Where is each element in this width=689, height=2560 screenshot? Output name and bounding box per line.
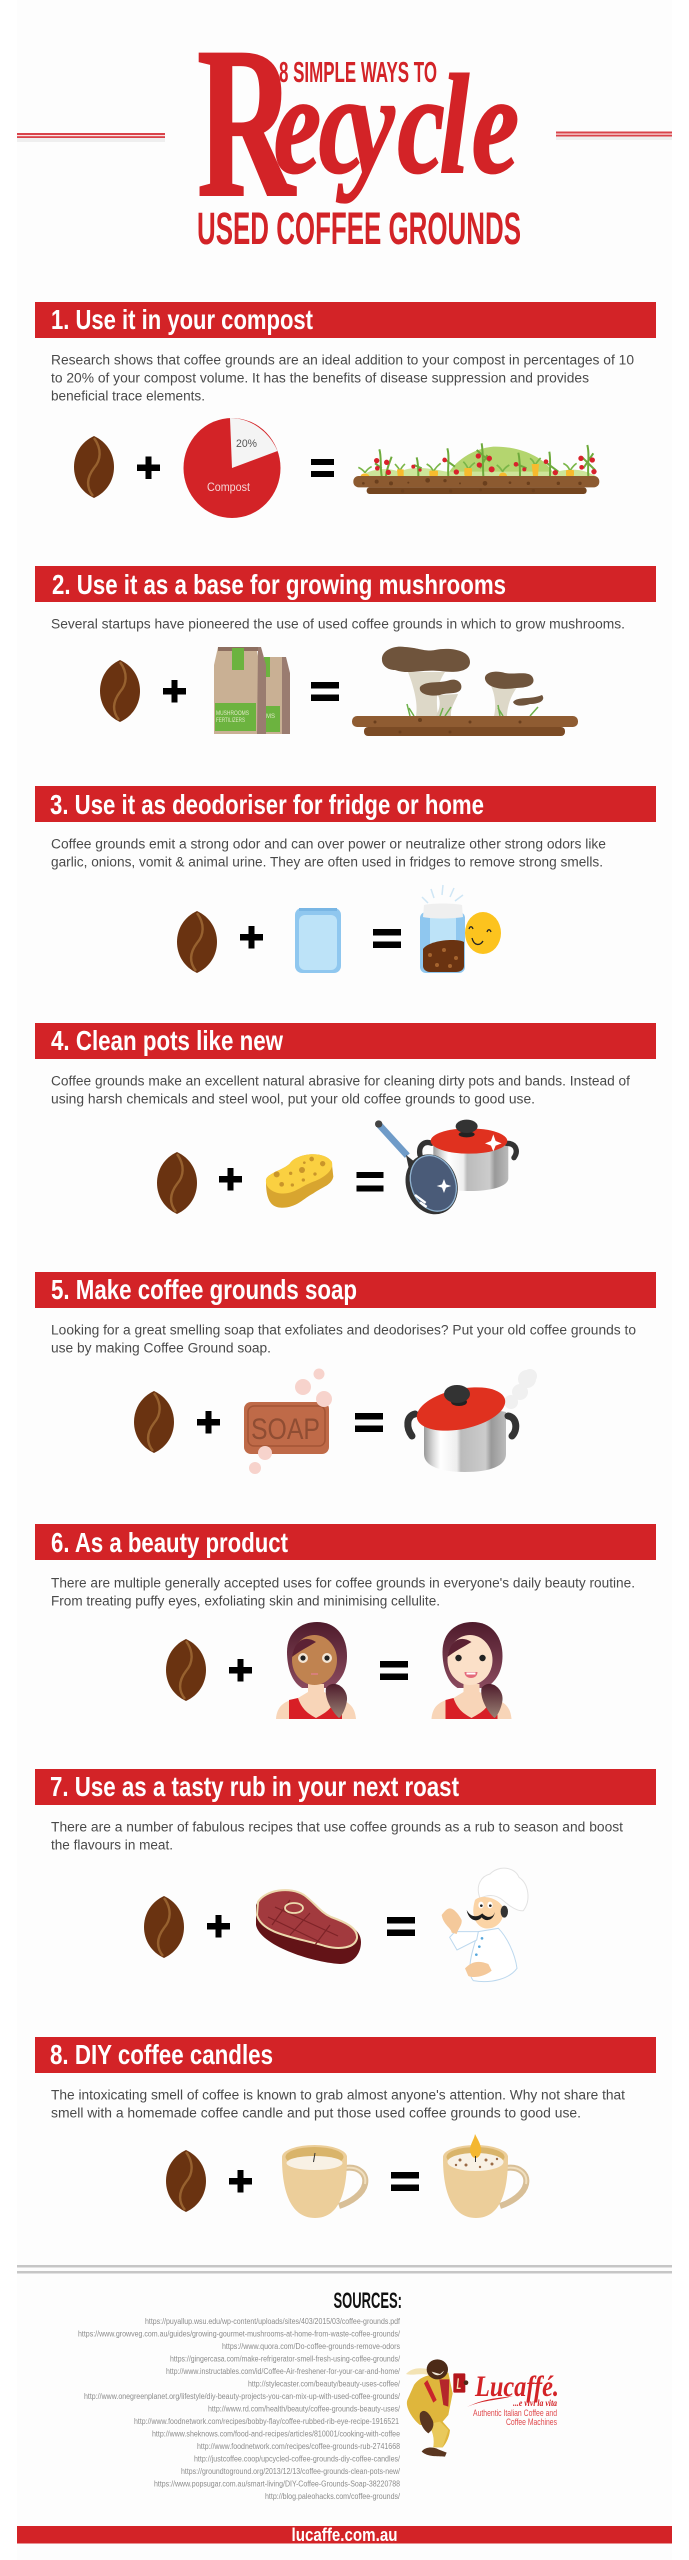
text block 7	[51, 1820, 623, 1852]
icon: coffee bean	[157, 1152, 197, 1214]
heading 8	[35, 2037, 656, 2073]
sources list: http://www.rd.com/health/beauty/coffee-grounds-beauty-uses/	[208, 2404, 401, 2414]
plus	[197, 1411, 220, 1434]
icon: fertilizer bags: FERTILIZERS	[216, 717, 245, 724]
equals	[391, 2172, 419, 2191]
equals	[311, 682, 339, 701]
icon: lit coffee candle	[443, 2134, 526, 2218]
icon: chef	[442, 1868, 528, 1982]
equals	[387, 1917, 415, 1936]
panel: 6 beauty	[35, 1524, 656, 1719]
text block 6	[51, 1576, 635, 1608]
icon: steak	[256, 1890, 361, 1964]
icon: sponge	[266, 1154, 333, 1208]
icon: coffee bean	[134, 1391, 174, 1453]
panel: 5 soap	[35, 1272, 656, 1474]
panel: 3 deodoriser	[35, 786, 656, 973]
icon: mug with candle wax	[282, 2145, 365, 2218]
sources list: https://gingercasa.com/make-refrigerator-smell-fresh-using-coffee-grounds/	[170, 2354, 401, 2364]
panel: 1 compost	[35, 302, 656, 518]
text block 8: The intoxicating smell of coffee is known to grab almost anyone's attention. Why not share that	[51, 2088, 625, 2102]
panel: 8 candles	[35, 2037, 656, 2218]
sources list: https://puyallup.wsu.edu/wp-content/uploads/sites/403/2015/03/coffee-grounds.pdf	[145, 2317, 401, 2326]
icon: fertilizer bags	[214, 647, 290, 734]
plus	[207, 1915, 230, 1938]
text block 1: beneficial trace elements.	[51, 388, 205, 404]
text block 3: Coffee grounds emit a strong odor and can over power or neutralize other strong odors like	[51, 836, 606, 852]
title	[197, 3, 521, 254]
icon: soap bar with bubbles: SOAP	[251, 1413, 320, 1446]
panel: 4 clean pots	[35, 1023, 656, 1222]
text block 4	[51, 1074, 630, 1106]
heading 3: 3. Use it as deodoriser for fridge or home	[50, 789, 484, 820]
text block 5	[51, 1322, 636, 1356]
icon: woman with coffee mask	[276, 1622, 356, 1719]
text block 1: Research shows that coffee grounds are an ideal addition to your compost in percentages of 10	[51, 352, 634, 368]
text block 8: smell with a homemade coffee candle and put those used coffee grounds to good use.	[51, 2106, 581, 2120]
sources list: http://blog.paleohacks.com/coffee-grounds/	[265, 2492, 401, 2501]
text block 5: use by making Coffee Ground soap.	[51, 1340, 271, 1356]
pie chart: 20 percent: 20%	[236, 438, 257, 450]
pie chart: 20 percent	[184, 418, 280, 518]
heading 1	[35, 302, 656, 338]
equals	[311, 459, 334, 477]
heading 7: 7. Use as a tasty rub in your next roast	[50, 1771, 459, 1802]
heading 5	[35, 1272, 656, 1308]
text block 3: garlic, onions, vomit & animal urine. They are often used in fridges to remove strong smells.	[51, 854, 603, 870]
text block 2: Several startups have pioneered the use of used coffee grounds in which to grow mushrooms.	[51, 616, 625, 632]
sources heading: SOURCES:	[334, 2288, 402, 2313]
panel: 7 roast rub	[35, 1769, 656, 1982]
text block 7: the flavours in meat.	[51, 1838, 173, 1852]
title word: Recycle: R	[197, 3, 296, 242]
icon: jar of coffee with smile	[420, 885, 501, 973]
heading 4: 4. Clean pots like new	[51, 1025, 283, 1056]
icon: mushrooms on soil	[352, 647, 578, 736]
text block 1: to 20% of your compost volume. It has the benefits of disease suppression and provides	[51, 370, 589, 386]
sources list: https://www.quora.com/Do-coffee-grounds-remove-odors	[222, 2342, 400, 2351]
equals	[373, 929, 401, 948]
Lucaffe logo: ...e vivi la vita	[513, 2398, 557, 2408]
plus	[240, 926, 263, 948]
text block 1	[51, 352, 634, 404]
icon: clean pot and pan	[375, 1120, 516, 1222]
sources list: https://groundtoground.org/2013/12/13/coffee-grounds-clean-pots-new/	[181, 2467, 401, 2476]
sources list: https://www.growveg.com.au/guides/growing-gourmet-mushrooms-at-home-from-waste-coffee-grounds/	[78, 2330, 401, 2338]
text block 7: There are a number of fabulous recipes that use coffee grounds as a rub to season and boost	[51, 1820, 623, 1834]
icon: fertilizer bags: MS	[266, 714, 275, 720]
plus	[137, 456, 160, 479]
icon: coffee bean	[144, 1896, 184, 1958]
sources list: http://www.foodnetwork.com/recipes/bobby-flay/coffee-rubbed-rib-eye-recipe-1916521	[134, 2417, 399, 2426]
title line: 8 simple ways to: 8 SIMPLE WAYS TO	[279, 57, 437, 89]
icon: coffee bean	[74, 436, 114, 498]
icon: coffee bean	[166, 1639, 206, 1701]
icon: Lucaffe mascot	[406, 2359, 468, 2457]
decorative title rules	[17, 132, 672, 142]
text block 5: Looking for a great smelling soap that exfoliates and deodorises? Put your old coffee grounds to	[51, 1322, 636, 1338]
icon: pot with steam	[408, 1369, 537, 1472]
sources list	[78, 2317, 401, 2501]
heading 4	[35, 1023, 656, 1059]
text block 8	[51, 2088, 625, 2120]
icon: woman with clear skin	[432, 1622, 512, 1719]
heading 5: 5. Make coffee grounds soap	[51, 1274, 357, 1305]
equals	[380, 1661, 408, 1680]
icon: coffee bean	[100, 660, 140, 722]
icon: coffee bean	[166, 2150, 206, 2212]
plus	[163, 680, 186, 702]
Lucaffe logo: Coffee Machines	[506, 2417, 557, 2428]
title word: Recycle	[197, 3, 519, 242]
sources list: http://www.sheknows.com/food-and-recipes/articles/810001/cooking-with-coffee	[152, 2430, 400, 2438]
sources list: http://justcoffee.coop/upcycled-coffee-grounds-diy-coffee-candles/	[194, 2454, 401, 2464]
equals	[355, 1413, 383, 1432]
equals	[356, 1172, 384, 1192]
sources list: https://www.popsugar.com.au/smart-living/DIY-Coffee-Grounds-Soap-38220788	[154, 2480, 400, 2488]
Lucaffe logo: Authentic Italian Coffee and	[473, 2408, 557, 2419]
icon: soap bar with bubbles	[244, 1368, 332, 1474]
Lucaffe logo	[467, 2370, 559, 2428]
pie chart: 20 percent: Compost	[207, 482, 251, 494]
footer bar	[17, 2525, 672, 2545]
Lucaffe logo: Lucaffé.	[474, 2370, 559, 2403]
plus	[219, 1168, 242, 1190]
text block 4: Coffee grounds make an excellent natural abrasive for cleaning dirty pots and bands. Instead of	[51, 1074, 630, 1088]
text block 3	[51, 836, 606, 870]
heading 1: 1. Use it in your compost	[51, 304, 313, 335]
plus	[229, 2170, 252, 2192]
sources list: http://stylecaster.com/beauty/beauty-uses-coffee/	[248, 2380, 401, 2388]
sources list: http://www.onegreenplanet.org/lifestyle/diy-beauty-projects-you-can-mix-up-with-used-coffee-grounds/	[84, 2392, 401, 2401]
footer bar: lucaffe.com.au	[292, 2525, 398, 2545]
icon: empty jar	[295, 908, 341, 973]
text block 6: There are multiple generally accepted uses for coffee grounds in everyone's daily beauty routine.	[51, 1576, 635, 1590]
divider	[17, 2265, 672, 2274]
panel: 2 mushrooms	[35, 566, 656, 736]
title word: Recycle: ecycle	[274, 46, 519, 204]
plus	[229, 1659, 252, 1682]
text block 6: From treating puffy eyes, exfoliating skin and minimising cellulite.	[51, 1594, 440, 1608]
heading 8: 8. DIY coffee candles	[50, 2039, 273, 2070]
heading 2: 2. Use it as a base for growing mushrooms	[52, 569, 506, 600]
icon: coffee bean	[177, 911, 217, 973]
sources list: http://www.instructables.com/id/Coffee-Air-freshener-for-your-car-and-home/	[166, 2367, 401, 2376]
icon: fertilizer bags: MUSHROOMS	[216, 710, 249, 717]
heading 6	[35, 1524, 656, 1560]
icon: vegetable garden	[353, 443, 599, 494]
sources list: http://www.foodnetwork.com/recipes/coffee-grounds-rub-2741668	[197, 2442, 400, 2451]
heading 6: 6. As a beauty product	[51, 1527, 288, 1558]
text block 4: using harsh chemicals and steel wool, put your old coffee grounds to good use.	[51, 1092, 535, 1106]
